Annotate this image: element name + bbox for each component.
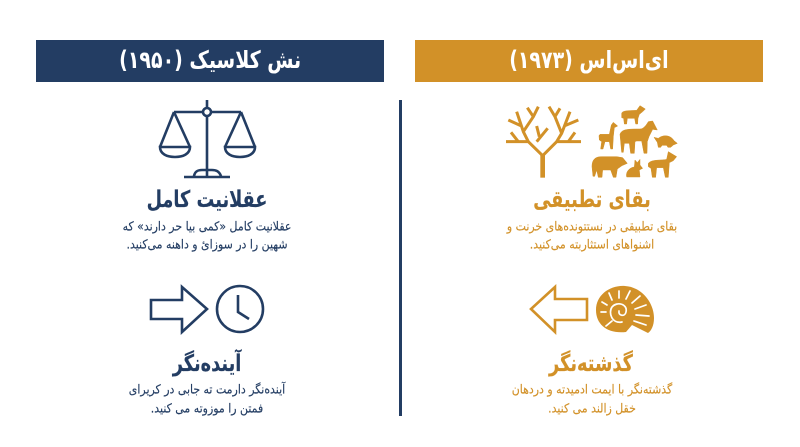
heading: backward-looking: گذشته‌نگر — [549, 351, 633, 377]
heading: adaptive survival: بقای تطبیقی — [533, 187, 651, 213]
text: forward-looking description line 2: فمتن را موزوته می کنید. — [151, 400, 263, 416]
text: full rationality description line 2: شهین را در سوزائ و داهنه می‌کنید. — [127, 236, 287, 252]
header: classic Nash: نش کلاسیک (۱۹۵۰) — [119, 46, 301, 74]
heading: full rationality: عقلانیت کامل — [147, 187, 267, 213]
header: ESS — [415, 40, 763, 82]
text: backward-looking description line 2: خقل زالند می کنید. — [548, 400, 636, 416]
heading: forward-looking: آینده‌نگر — [173, 351, 241, 377]
text: full rationality description: عقلانیت کامل «کمی بیا حر دارند» که — [123, 218, 291, 234]
header: classic Nash — [36, 40, 384, 82]
center divider — [399, 100, 402, 416]
text: forward-looking description: آینده‌نگر دارمت ته جابی در کریرای — [129, 382, 285, 396]
text: adaptive survival description: بقای تطبیقی در نستتونده‌های خرنت و — [507, 218, 677, 234]
text: adaptive survival description line 2: اشنواهای استثاربته می‌کنید. — [530, 236, 654, 252]
text: backward-looking description: گذشته‌نگر با ایمت ادمیدته و دردهان — [512, 382, 672, 396]
header: ESS: ای‌اس‌اس (۱۹۷۳) — [509, 46, 669, 74]
